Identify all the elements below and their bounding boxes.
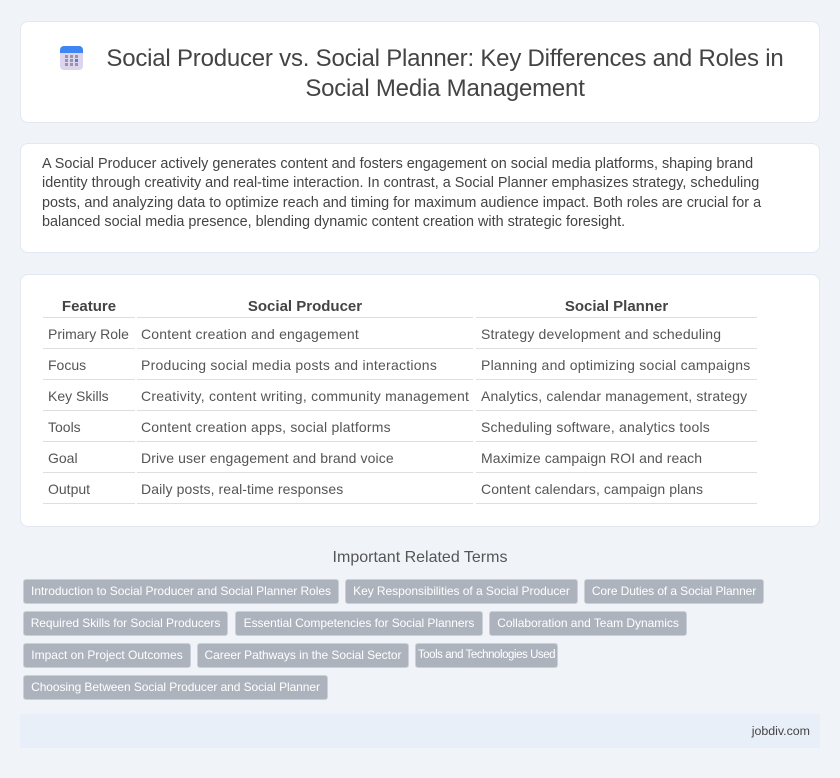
- related term tags: Tools and Technologies Used: [418, 649, 555, 661]
- table header: Feature: [62, 298, 116, 315]
- panel: comparison table card: [20, 274, 820, 527]
- related term tags: Introduction to Social Producer and Social Planner Roles: [31, 584, 331, 598]
- row: key skills: Creativity, content writing, community management: [141, 388, 469, 404]
- comparison table: [43, 298, 757, 504]
- row: primary role: Content creation and engagement: [141, 326, 359, 342]
- related term tags: Impact on Project Outcomes: [31, 648, 183, 662]
- footer site name: jobdiv.com: [752, 724, 810, 738]
- row: tools: Scheduling software, analytics tools: [481, 419, 710, 435]
- row: goal: Drive user engagement and brand voice: [141, 450, 394, 466]
- table header: [62, 298, 668, 315]
- heading: important related terms: Important Related Terms: [333, 549, 507, 566]
- related term tags: Collaboration and Team Dynamics: [497, 616, 679, 630]
- row: focus: Producing social media posts and interactions: [141, 357, 437, 373]
- row: primary role: [48, 326, 721, 342]
- row: focus: Focus: [48, 357, 86, 373]
- row: key skills: [48, 388, 747, 404]
- related term tags: Essential Competencies for Social Planners: [244, 616, 474, 630]
- row: tools: Content creation apps, social platforms: [141, 419, 391, 435]
- row: focus: Planning and optimizing social campaigns: [481, 357, 751, 373]
- row: output: Daily posts, real-time responses: [141, 481, 343, 497]
- related term tags: Core Duties of a Social Planner: [592, 584, 756, 598]
- title: Social Media Management: [305, 75, 585, 102]
- intro paragraph: balanced social media presence, blending dynamic content creation with strategic foresight.: [42, 214, 625, 230]
- related term tags: Required Skills for Social Producers: [31, 616, 220, 630]
- table header: Social Planner: [565, 298, 668, 315]
- related term tags: Key Responsibilities of a Social Producer: [353, 584, 570, 598]
- row: goal: Maximize campaign ROI and reach: [481, 450, 702, 466]
- panel: title card: [20, 21, 820, 123]
- row: tools: Tools: [48, 419, 81, 435]
- row: output: Output: [48, 481, 90, 497]
- related term tags: Choosing Between Social Producer and Social Planner: [31, 680, 320, 694]
- row: key skills: Key Skills: [48, 388, 109, 404]
- row: goal: [48, 450, 702, 466]
- row: output: [48, 481, 703, 497]
- row: tools: [48, 419, 710, 435]
- intro paragraph: A Social Producer actively generates content and fosters engagement on social media platforms, shaping brand: [42, 156, 753, 172]
- intro paragraph: [42, 156, 762, 230]
- row: output: Content calendars, campaign plans: [481, 481, 703, 497]
- row: primary role: Strategy development and scheduling: [481, 326, 721, 342]
- title: [106, 45, 784, 102]
- related term tags: [23, 579, 764, 700]
- row: primary role: Primary Role: [48, 326, 129, 342]
- row: focus: [48, 357, 751, 373]
- table header: Social Producer: [248, 298, 362, 315]
- footer bar: [20, 714, 820, 748]
- row: key skills: Analytics, calendar management, strategy: [481, 388, 747, 404]
- related term tags: Career Pathways in the Social Sector: [205, 648, 401, 662]
- icon: calendar: [60, 46, 83, 70]
- row: goal: Goal: [48, 450, 78, 466]
- title: Social Producer vs. Social Planner: Key Differences and Roles in: [106, 45, 784, 72]
- intro paragraph: posts, and analyzing data to optimize reach and timing for maximum audience impact. Both roles are crucial for a: [42, 195, 761, 211]
- intro paragraph: identity through creativity and real-time interaction. In contrast, a Social Planner emphasizes strategy, scheduling: [42, 175, 759, 191]
- panel: intro text card: [20, 143, 820, 253]
